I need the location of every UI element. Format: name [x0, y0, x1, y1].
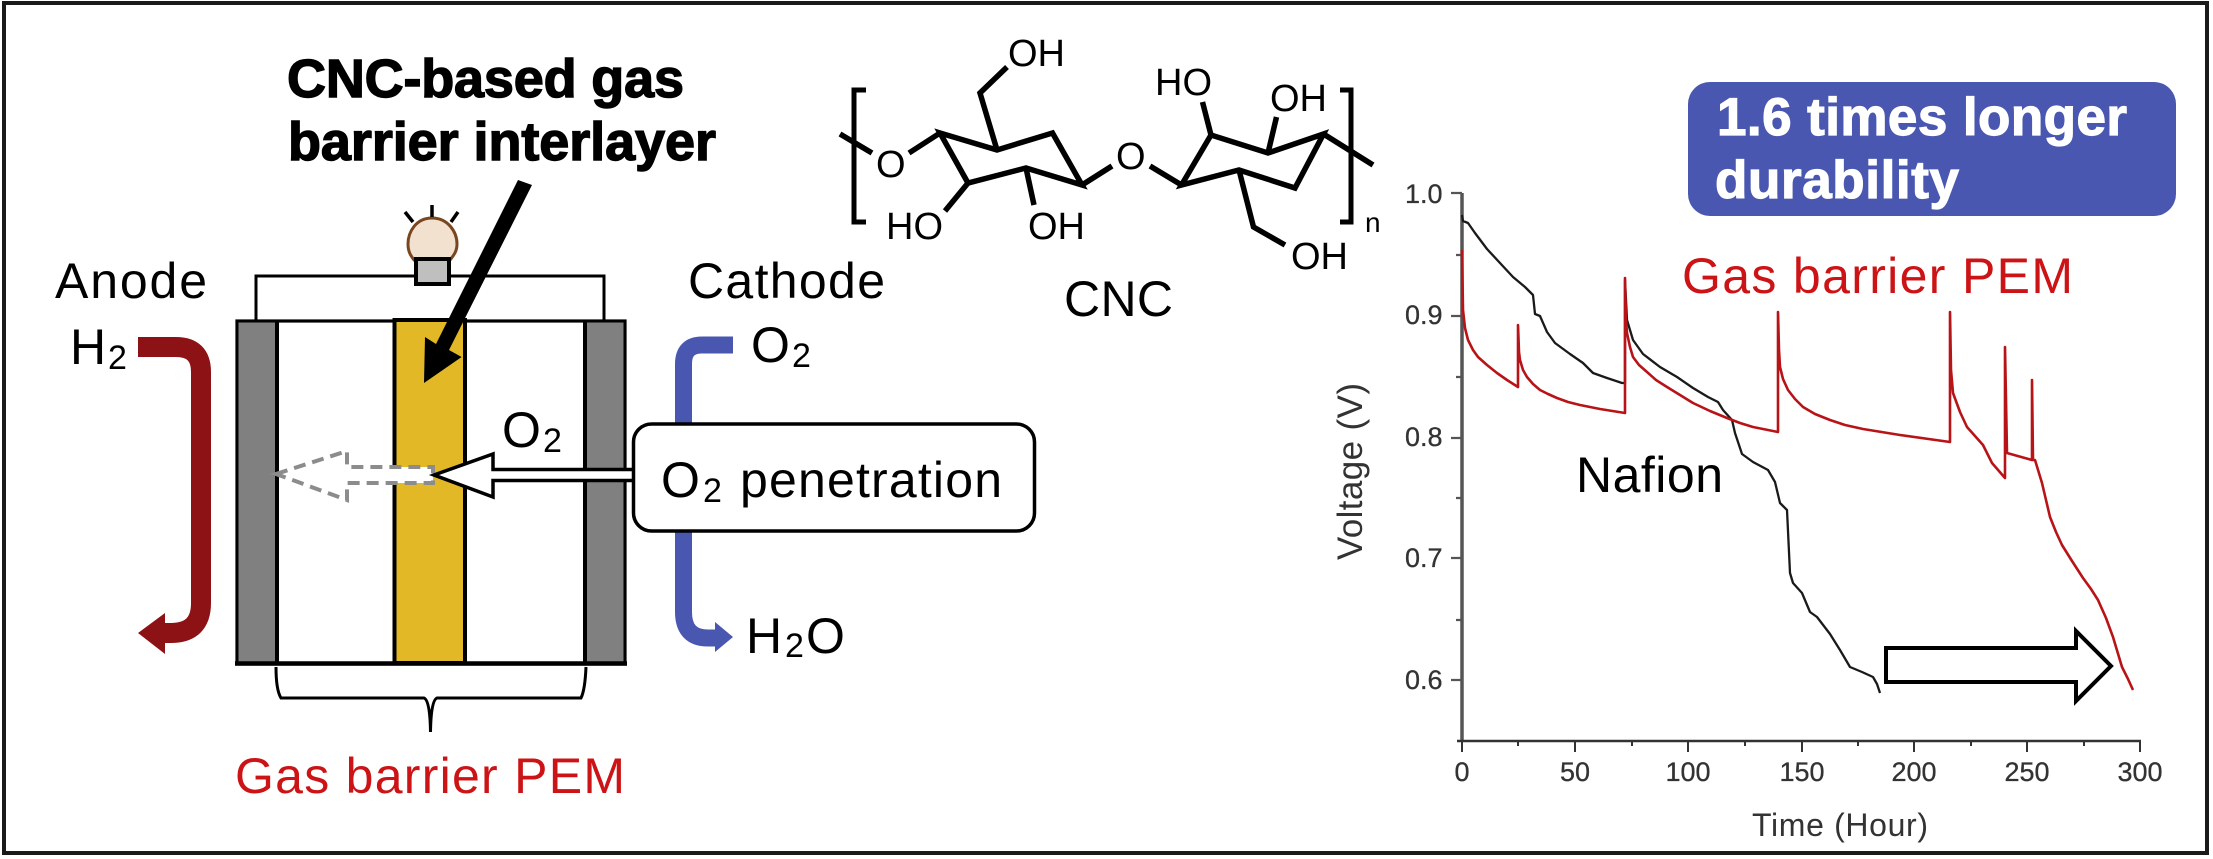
- x tick labels: 50: [1560, 757, 1590, 787]
- panel: CNC molecular structure: [840, 33, 1381, 327]
- x tick labels: 150: [1779, 757, 1825, 787]
- bonds and rings: [840, 67, 1373, 245]
- atom labels: O: [1116, 136, 1146, 178]
- y tick labels: 1.0: [1405, 179, 1443, 209]
- atom labels: OH: [1008, 33, 1065, 75]
- callout: O2 penetration: [634, 424, 1034, 531]
- callout: 1.6 times longer durability: [1688, 82, 2176, 216]
- label: Gas barrier PEM: Gas barrier PEM: [235, 748, 625, 804]
- atom labels: OH: [1270, 78, 1327, 120]
- label: H2O outlet: [746, 608, 845, 665]
- atom labels: n: [1365, 207, 1381, 238]
- callout: 1.6 times longer durability: 1.6 times longer: [1717, 88, 2127, 147]
- heading: CNC-based gas barrier interlayer: CNC-based gas: [287, 49, 684, 109]
- label: H2 inlet: 2: [108, 339, 127, 377]
- atom labels: O: [876, 144, 906, 186]
- y tick labels: 0.8: [1405, 422, 1443, 452]
- cell body with electrodes: [235, 320, 627, 665]
- panel: durability chart: [1331, 82, 2176, 843]
- callout: O2 penetration: penetration: [740, 452, 1002, 508]
- panel: fuel cell schematic: [55, 49, 1034, 804]
- arrow: durability gain: [1886, 631, 2111, 701]
- arrow: hydrogen flow: [138, 347, 201, 654]
- label: O2 inlet: O: [751, 317, 790, 373]
- label: O2 inlet: 2: [792, 337, 811, 375]
- y tick labels: 0.9: [1405, 300, 1443, 330]
- arrow: oxygen penetration: [434, 454, 640, 497]
- label: O2 in cell: 2: [543, 422, 562, 460]
- callout: O2 penetration: 2: [703, 472, 722, 510]
- label: Anode: Anode: [55, 253, 207, 309]
- line: gas barrier PEM: [1462, 250, 2133, 690]
- atom labels: OH: [1028, 206, 1085, 248]
- heading: CNC-based gas barrier interlayer: [287, 49, 716, 172]
- arrow: blocked oxygen (dashed): [276, 451, 433, 500]
- x axis: [1457, 741, 2141, 752]
- label: H2O outlet: O: [806, 608, 845, 664]
- atom labels: HO: [886, 206, 943, 248]
- x axis title: Time (Hour): [1752, 807, 1928, 843]
- atom labels: OH: [1291, 236, 1348, 278]
- atom labels: [876, 33, 1381, 278]
- x tick labels: 300: [2117, 757, 2163, 787]
- x tick labels: 250: [2004, 757, 2050, 787]
- arrow: oxygen to water flow: [684, 345, 733, 652]
- label: H2 inlet: H: [70, 319, 106, 375]
- bracket under membrane: [276, 667, 586, 732]
- yellow gas barrier interlayer: [394, 320, 465, 663]
- label: Gas barrier PEM line: Gas barrier PEM: [1682, 248, 2073, 304]
- x tick labels: 0: [1454, 757, 1470, 787]
- circuit wire: [256, 276, 604, 320]
- label: Nafion line: Nafion: [1576, 447, 1723, 503]
- arrow: pointer to interlayer: [424, 180, 532, 383]
- x tick labels: [1454, 757, 2163, 787]
- label: CNC: CNC: [1064, 271, 1173, 327]
- y tick labels: [1405, 179, 1443, 695]
- label: O2 inlet: [751, 317, 811, 375]
- y axis title: Voltage (V): [1331, 383, 1370, 560]
- label: O2 in cell: [502, 402, 562, 460]
- x tick labels: 100: [1665, 757, 1711, 787]
- atom labels: HO: [1155, 62, 1212, 104]
- callout: O2 penetration: O: [661, 452, 700, 508]
- icon: light bulb: [405, 205, 458, 284]
- label: H2 inlet: [70, 319, 127, 377]
- x tick labels: 200: [1891, 757, 1937, 787]
- label: H2O outlet: 2: [785, 627, 804, 665]
- line: Nafion: [1462, 215, 1880, 693]
- y tick labels: 0.7: [1405, 543, 1443, 573]
- label: Cathode: Cathode: [688, 253, 885, 309]
- label: O2 in cell: O: [502, 402, 541, 458]
- heading: CNC-based gas barrier interlayer: barrier interlayer: [288, 112, 716, 172]
- callout: 1.6 times longer durability: durability: [1715, 151, 1960, 210]
- label: H2O outlet: H: [746, 608, 782, 664]
- y axis: [1451, 193, 1462, 741]
- y tick labels: 0.6: [1405, 665, 1443, 695]
